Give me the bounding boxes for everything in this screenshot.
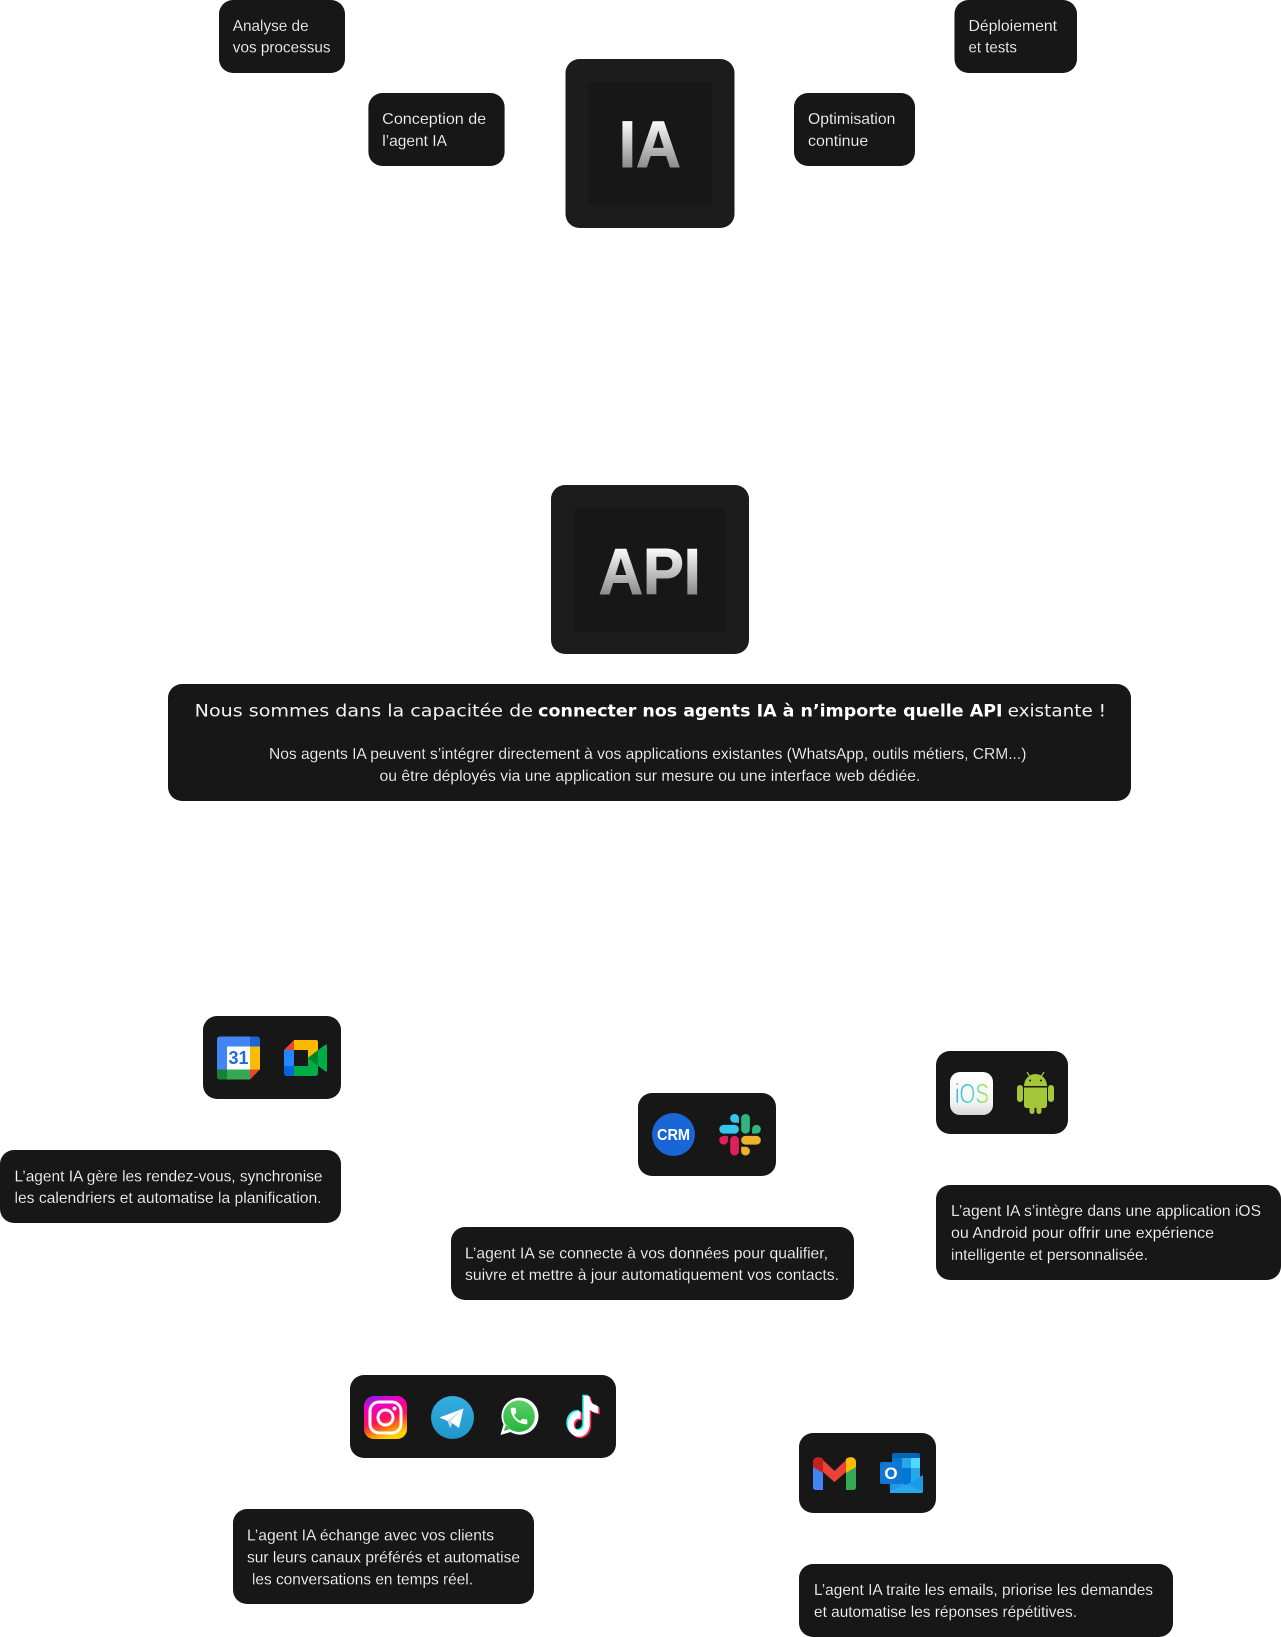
- icon: CRM: CRM: [657, 1127, 690, 1144]
- icon: API tile: [551, 485, 749, 654]
- chip: iOS and Android icons: [936, 1051, 1068, 1134]
- icon: WhatsApp: [500, 1398, 538, 1435]
- chip: CRM and Slack icons: [638, 1093, 776, 1176]
- icon: Google Meet: [284, 1040, 327, 1076]
- step: Optimisation continue: Optimisation: [808, 111, 895, 128]
- text panel: messaging: sur leurs canaux préférés et automatise: [247, 1550, 520, 1566]
- text panel: calendar: les calendriers et automatise la planification.: [14, 1190, 322, 1207]
- step: Déploiement et tests: [954, 0, 1077, 73]
- text panel: messaging: [233, 1509, 534, 1604]
- text panel: messaging: L’agent IA échange avec vos clients: [247, 1528, 494, 1544]
- heading: API capability: [195, 702, 1106, 722]
- text: API description: [269, 746, 1026, 785]
- heading: API capability: connecter nos agents IA à n’importe quelle API: [538, 702, 1002, 722]
- chip: messaging icons: [350, 1375, 616, 1458]
- icon: Slack: [719, 1114, 761, 1156]
- step: Déploiement et tests: Déploiement: [968, 18, 1058, 35]
- icon: Google Calendar: 31: [228, 1048, 249, 1068]
- heading: API capability: Nous sommes dans la capacitée de: [195, 702, 533, 722]
- chip: email icons: [799, 1433, 936, 1513]
- text panel: CRM: [451, 1227, 854, 1300]
- step: Analyse de vos processus: [219, 0, 345, 73]
- text panel: email: [799, 1564, 1173, 1637]
- icon: Outlook: O: [884, 1464, 898, 1483]
- text panel: iOS and Android: intelligente et personnalisée.: [951, 1247, 1148, 1264]
- step: Analyse de vos processus: vos processus: [233, 40, 330, 56]
- icon: Instagram: [364, 1396, 407, 1439]
- text: API description: Nos agents IA peuvent s’intégrer directement à vos applications existantes (WhatsApp, outils métiers, CRM...): [269, 746, 1026, 763]
- panel: API explanation: [168, 684, 1131, 801]
- icon: API tile: API: [599, 535, 701, 608]
- icon: IA tile: IA: [619, 107, 681, 181]
- icon: Telegram: [431, 1396, 474, 1439]
- step: Conception de l'agent IA: [368, 93, 505, 166]
- icon: iOS: iOS: [955, 1078, 989, 1109]
- step: Analyse de vos processus: Analyse de: [233, 18, 309, 35]
- step: Conception de l'agent IA: l’agent IA: [382, 133, 447, 150]
- text panel: iOS and Android: ou Android pour offrir une expérience: [951, 1225, 1214, 1242]
- chip: calendar and meet icons: [203, 1016, 341, 1099]
- text panel: messaging: les conversations en temps réel.: [252, 1572, 473, 1588]
- step: Conception de l'agent IA: Conception de: [382, 111, 486, 128]
- step: Optimisation continue: continue: [808, 133, 868, 150]
- text panel: iOS and Android: [936, 1185, 1281, 1280]
- text panel: iOS and Android: L’agent IA s’intègre dans une application iOS: [951, 1203, 1261, 1220]
- text panel: calendar: L’agent IA gère les rendez-vous, synchronise: [14, 1168, 323, 1185]
- icon: TikTok: [566, 1395, 600, 1438]
- icon: Gmail: [813, 1457, 856, 1490]
- text panel: calendar: [0, 1150, 341, 1223]
- step: Déploiement et tests: et tests: [968, 40, 1017, 56]
- text panel: email: et automatise les réponses répétitives.: [814, 1604, 1077, 1621]
- text panel: CRM: L’agent IA se connecte à vos données pour qualifier,: [465, 1246, 828, 1262]
- heading: API capability: existante !: [1008, 702, 1106, 722]
- text panel: email: L’agent IA traite les emails, priorise les demandes: [814, 1582, 1153, 1599]
- icon: Android: [1017, 1072, 1054, 1114]
- icon: IA tile: [566, 59, 734, 228]
- text: API description: ou être déployés via une application sur mesure ou une interface web dédiée.: [380, 768, 920, 785]
- text panel: CRM: suivre et mettre à jour automatiquement vos contacts.: [465, 1267, 839, 1284]
- step: Optimisation continue: [794, 93, 915, 166]
